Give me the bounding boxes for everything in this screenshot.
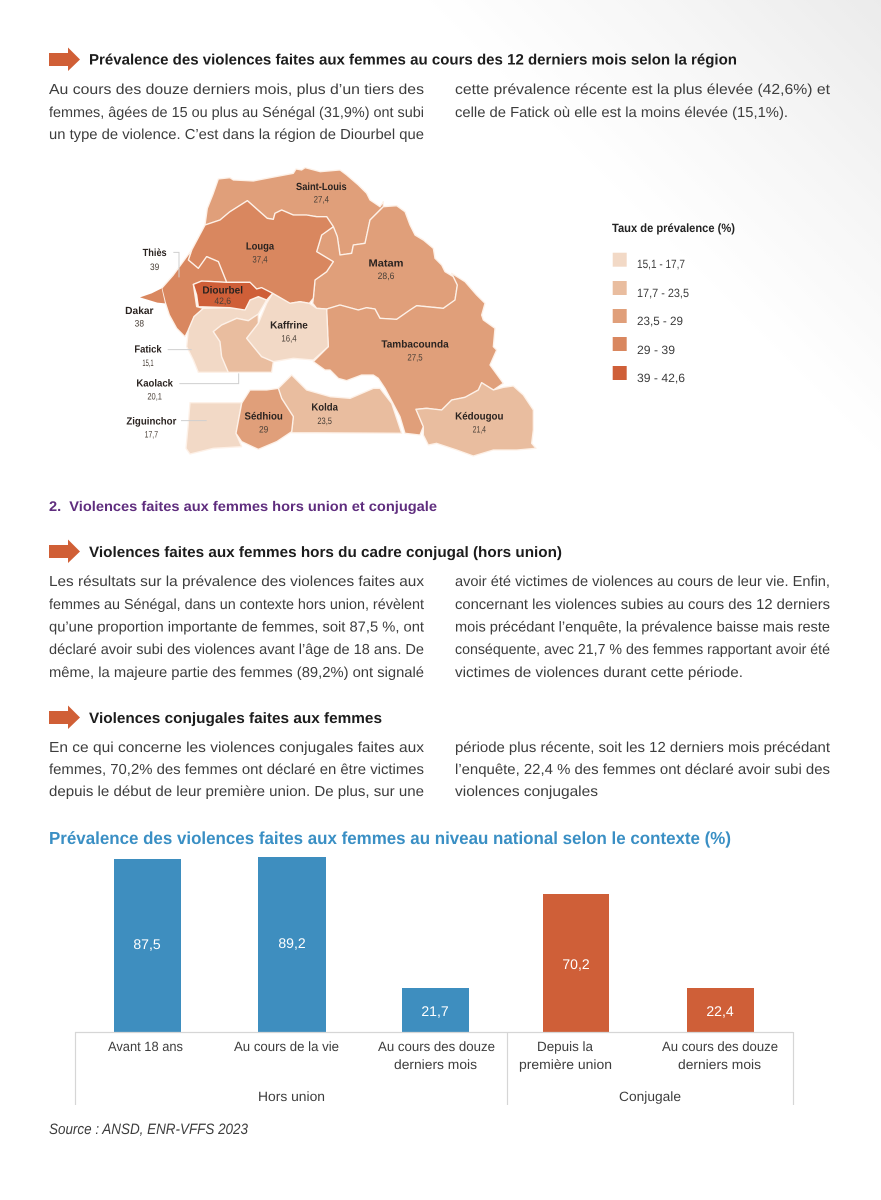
axis labels: Au cours de la vie (234, 1039, 339, 1054)
bar chart: national prevalence by context (75, 857, 794, 1105)
map labels: 16,4 (281, 333, 297, 344)
axis labels: première union (519, 1057, 612, 1072)
axis labels (108, 1039, 778, 1104)
icon: arrow, conjugales (49, 706, 80, 729)
text block: regional intro: cette prévalence récente est la plus élevée (42,6%) et (455, 82, 830, 98)
map labels: 21,4 (473, 424, 486, 434)
region: Ziguinchor (186, 403, 242, 454)
map labels: Tambacounda (381, 338, 449, 350)
text block: hors union: déclaré avoir subi des violences avant l’âge de 18 ans. De (49, 642, 424, 658)
axis labels: derniers mois (678, 1057, 761, 1072)
region: Diourbel (193, 281, 273, 310)
map labels: Louga (246, 240, 274, 252)
bar: Au cours de la vie: 89,2 (278, 935, 306, 951)
text block: conjugales: depuis le début de leur première union. De plus, sur une (49, 784, 424, 800)
map labels: Fatick (134, 343, 162, 355)
region: Kaolack (213, 314, 273, 372)
map labels: 27,5 (407, 352, 423, 363)
text block: regional intro: celle de Fatick où elle est la moins élevée (15,1%). (455, 105, 788, 121)
map labels: Dakar (125, 305, 153, 316)
map labels: 38 (135, 318, 144, 329)
region: Fatick (187, 297, 267, 372)
chart title: Prévalence des violences faites aux femmes au niveau national selon le contexte (%) (49, 828, 731, 848)
bar: Avant 18 ans (114, 859, 181, 1032)
source note: Source : ANSD, ENR-VFFS 2023 (49, 1121, 249, 1138)
text block: regional intro (49, 82, 830, 143)
legend: prevalence rate: 15,1 - 17,7 (637, 257, 685, 271)
region: Saint-Louis (205, 168, 383, 255)
region: Tambacounda (313, 273, 503, 435)
legend: prevalence rate: 17,7 - 23,5 (637, 286, 689, 300)
text block: conjugales: période plus récente, soit les 12 derniers mois précédant (455, 740, 830, 756)
region: Kaffrine (247, 293, 328, 362)
axis labels: Hors union (258, 1089, 325, 1104)
bar: conjugale douze derniers mois: 22,4 (706, 1003, 734, 1019)
text block: conjugales (49, 740, 830, 800)
region: Dakar (140, 288, 165, 303)
map labels (125, 181, 503, 439)
map leader lines (168, 252, 239, 421)
region: Sédhiou (236, 388, 293, 449)
axis labels: derniers mois (394, 1057, 477, 1072)
bar: Avant 18 ans: 87,5 (133, 936, 161, 952)
text block: conjugales: violences conjugales (455, 784, 598, 800)
text block: hors union: Les résultats sur la prévalence des violences faites aux (49, 574, 425, 590)
icon: arrow, regional heading (49, 48, 80, 71)
bar: Depuis la première union: 70,2 (562, 956, 590, 972)
text block: regional intro: Au cours des douze derniers mois, plus d’un tiers des (49, 82, 424, 98)
map labels: Matam (368, 257, 403, 269)
bar: Au cours de la vie (258, 857, 326, 1032)
map labels: 29 (259, 424, 268, 434)
heading: regional prevalence: Prévalence des violences faites aux femmes au cours des 12 derniers mois selon la région (89, 52, 737, 68)
text block: conjugales: En ce qui concerne les violences conjugales faites aux (49, 740, 425, 756)
map labels: Thiès (143, 247, 167, 258)
text block: hors union: même, la majeure partie des femmes (89,2%) ont signalé (49, 665, 424, 681)
map labels: 17,7 (145, 429, 158, 439)
map labels: Saint-Louis (296, 181, 347, 192)
legend: prevalence rate: Taux de prévalence (%) (612, 221, 735, 235)
text block: regional intro: un type de violence. C’est dans la région de Diourbel que (49, 127, 424, 143)
map labels: 42,6 (214, 296, 231, 306)
map labels: 39 (150, 262, 159, 272)
heading: conjugales: Violences conjugales faites aux femmes (89, 710, 382, 727)
bar: Depuis la première union (543, 894, 609, 1032)
text block: hors union: mois précédant l’enquête, la prévalence baisse mais reste (455, 620, 830, 636)
map labels: 27,4 (314, 194, 329, 205)
text block: conjugales: femmes, 70,2% des femmes ont déclaré en être victimes (49, 762, 424, 778)
text block: hors union: concernant les violences subies au cours des 12 derniers (455, 597, 830, 613)
bar: hors union douze derniers mois: 21,7 (421, 1003, 449, 1019)
map labels: Kaolack (136, 377, 173, 389)
map labels: Kédougou (455, 410, 503, 422)
map labels: 37,4 (252, 254, 268, 265)
legend: prevalence rate: 23,5 - 29 (637, 314, 683, 328)
map labels: Ziguinchor (126, 415, 176, 427)
region: Kédougou (416, 383, 536, 456)
map labels: 20,1 (147, 391, 162, 401)
map labels: 28,6 (378, 271, 394, 281)
chart axis (75, 1032, 794, 1105)
region: Matam (313, 206, 457, 319)
map labels: 23,5 (317, 416, 332, 426)
map labels: Sédhiou (244, 410, 283, 422)
bar: conjugale douze derniers mois (687, 988, 754, 1032)
text block: hors union: femmes au Sénégal, dans un contexte hors union, révèlent (49, 597, 424, 613)
axis labels: Au cours des douze (662, 1039, 778, 1054)
region: Thiès (162, 250, 227, 337)
icon: arrow, hors union (49, 540, 80, 563)
heading: hors union: Violences faites aux femmes hors du cadre conjugal (hors union) (89, 544, 562, 561)
text block: hors union: avoir été victimes de violences au cours de leur vie. Enfin, (455, 574, 830, 590)
region: Kolda (278, 375, 402, 433)
axis labels: Conjugale (619, 1089, 681, 1104)
axis labels: Au cours des douze (378, 1039, 495, 1054)
text block: regional intro: femmes, âgées de 15 ou plus au Sénégal (31,9%) ont subi (49, 105, 424, 121)
bar: hors union douze derniers mois (402, 988, 469, 1032)
map labels: Kolda (311, 401, 338, 413)
axis labels: Depuis la (537, 1039, 593, 1054)
map labels: Kaffrine (270, 319, 308, 331)
region: Louga (188, 201, 333, 303)
text block: hors union: victimes de violences durant cette période. (455, 665, 743, 681)
axis labels: Avant 18 ans (108, 1039, 183, 1054)
text block: conjugales: l’enquête, 22,4 % des femmes ont déclaré avoir subi des (455, 762, 830, 778)
legend: prevalence rate (612, 221, 735, 385)
legend: prevalence rate: 39 - 42,6 (637, 371, 685, 385)
legend: prevalence rate: 29 - 39 (637, 343, 675, 357)
map labels: Diourbel (202, 284, 243, 296)
map: Senegal regions (125, 168, 536, 456)
text block: hors union: qu’une proportion importante de femmes, soit 87,5 %, ont (49, 620, 424, 636)
text block: hors union (49, 574, 830, 681)
map labels: 15,1 (142, 358, 154, 368)
section heading 2: 2. Violences faites aux femmes hors union et conjugale (49, 498, 437, 514)
text block: hors union: conséquente, avec 21,7 % des femmes rapportant avoir été (455, 642, 830, 658)
